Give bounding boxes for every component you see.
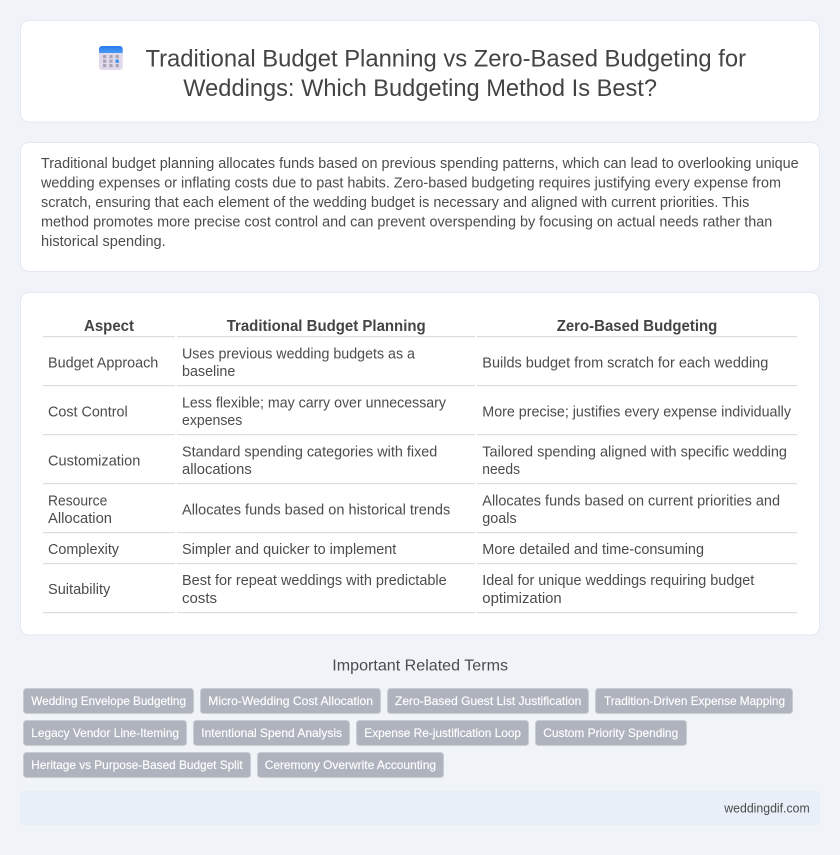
text block: introduction paragraph: method promotes more precise cost control and can prevent overspending by focusing on actual needs rather than: [41, 214, 772, 230]
tag: legacy vendor line-iteming: [24, 720, 186, 746]
row: customization: [43, 444, 797, 484]
tag: wedding envelope budgeting: [24, 688, 194, 714]
tag: custom priority spending: [536, 720, 686, 746]
row: resource allocation: Allocates funds based on current priorities and: [482, 493, 780, 509]
row: suitability: optimization: [482, 591, 562, 607]
tag: heritage vs purpose-based budget split: Heritage vs Purpose-Based Budget Split: [31, 758, 243, 772]
footer: weddingdif.com: [723, 801, 810, 815]
row: customization: allocations: [182, 462, 252, 478]
row: budget approach: Budget Approach: [48, 355, 158, 371]
text block: introduction paragraph: wedding expenses or inflating costs due to past habits. Zero-based budgeting requires justifying every expense from: [40, 176, 781, 192]
row: customization: needs: [482, 462, 520, 478]
tag: zero-based guest list justification: Zero-Based Guest List Justification: [395, 694, 581, 708]
row: suitability: costs: [182, 591, 217, 607]
heading: important related terms: Important Related Terms: [332, 658, 508, 675]
table header: Zero-Based Budgeting: [557, 318, 717, 335]
title: Traditional Budget Planning vs Zero-Based Budgeting for: [146, 46, 746, 73]
tag: tradition-driven expense mapping: Tradition-Driven Expense Mapping: [604, 694, 785, 708]
text block: introduction paragraph: scratch, ensuring that each element of the wedding budget is necessary and aligned with current priorities. This: [41, 195, 749, 211]
tag: ceremony overwrite accounting: [258, 752, 444, 778]
row: complexity: More detailed and time-consuming: [482, 542, 704, 558]
table header: Aspect: [84, 318, 135, 335]
row: suitability: Ideal for unique weddings requiring budget: [482, 573, 754, 589]
row: customization: Customization: [48, 453, 140, 469]
row: resource allocation: Allocates funds based on historical trends: [182, 502, 450, 518]
row: resource allocation: goals: [482, 511, 517, 527]
row: cost control: Less flexible; may carry over unnecessary: [182, 395, 447, 411]
panel: related term tags: [24, 688, 792, 778]
row: cost control: Cost Control: [48, 404, 128, 420]
row: cost control: [43, 395, 797, 435]
row: suitability: Best for repeat weddings with predictable: [182, 573, 447, 589]
tag: tradition-driven expense mapping: [596, 688, 792, 714]
title: [146, 46, 746, 102]
tag: intentional spend analysis: [194, 720, 350, 746]
row: complexity: Simpler and quicker to implement: [182, 542, 396, 558]
row: customization: Standard spending categories with fixed: [182, 444, 437, 460]
tag: wedding envelope budgeting: Wedding Envelope Budgeting: [31, 694, 186, 708]
row: budget approach: Builds budget from scratch for each wedding: [482, 355, 768, 371]
tag: ceremony overwrite accounting: Ceremony Overwrite Accounting: [265, 758, 436, 772]
tag: expense re-justification loop: Expense Re-justification Loop: [364, 726, 521, 740]
tag: custom priority spending: Custom Priority Spending: [543, 726, 678, 740]
panel: introduction text: [20, 142, 820, 272]
tag: heritage vs purpose-based budget split: [24, 752, 250, 778]
text block: introduction paragraph: [40, 156, 799, 250]
tag: zero-based guest list justification: [388, 688, 588, 714]
row: budget approach: Uses previous wedding budgets as a: [182, 346, 415, 362]
row: complexity: Complexity: [48, 542, 120, 558]
table header: Traditional Budget Planning: [227, 318, 426, 335]
table header: [43, 318, 797, 337]
footer: [20, 791, 820, 825]
tag: expense re-justification loop: [356, 720, 528, 746]
icon: calendar: [99, 46, 123, 70]
row: budget approach: baseline: [182, 364, 235, 380]
row: resource allocation: Resource: [48, 493, 107, 509]
text block: introduction paragraph: historical spending.: [41, 234, 166, 250]
row: suitability: [43, 573, 797, 613]
text block: introduction paragraph: Traditional budget planning allocates funds based on previous spending patterns, which can lead to overlooking unique: [41, 156, 799, 172]
row: complexity: [43, 542, 797, 564]
tag: intentional spend analysis: Intentional Spend Analysis: [201, 726, 342, 740]
panel: comparison table: [20, 292, 820, 635]
row: resource allocation: Allocation: [48, 511, 112, 527]
row: resource allocation: [43, 493, 797, 533]
row: suitability: Suitability: [48, 582, 111, 598]
tag: legacy vendor line-iteming: Legacy Vendor Line-Iteming: [31, 726, 179, 740]
tag: micro-wedding cost allocation: [200, 688, 380, 714]
tag: micro-wedding cost allocation: Micro-Wedding Cost Allocation: [208, 694, 373, 708]
row: budget approach: [43, 346, 797, 386]
title: Weddings: Which Budgeting Method Is Best?: [183, 75, 657, 102]
row: customization: Tailored spending aligned with specific wedding: [482, 444, 787, 460]
row: cost control: expenses: [182, 413, 242, 429]
panel: title card: [20, 20, 820, 122]
row: cost control: More precise; justifies every expense individually: [482, 404, 792, 420]
